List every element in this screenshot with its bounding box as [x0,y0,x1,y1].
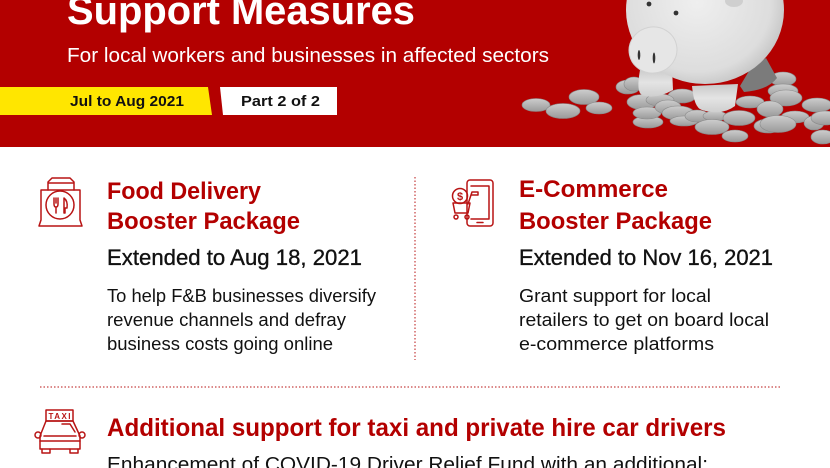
extension date: Extended to Nov 16, 2021 [519,245,773,270]
heading: Booster Package [519,208,712,235]
part tag: Part 2 of 2 [241,93,320,110]
icon: taxi [35,410,85,453]
heading: Additional support for taxi and private hire car drivers [107,414,726,442]
pig legs [740,58,777,92]
icon: food delivery bag [39,178,82,226]
icon: taxi: TAXI [48,412,70,421]
header banner [0,0,830,147]
date tag [0,87,212,115]
date tag: Jul to Aug 2021 [70,93,184,110]
pig body [626,0,784,84]
pig snout [625,23,681,77]
description: business costs going online [107,334,333,354]
heading: Food Delivery [107,178,262,205]
description: To help F&B businesses diversify [107,286,376,306]
subtitle: For local workers and businesses in affected sectors [67,45,549,67]
icon: e-commerce phone and cart [452,180,493,226]
part tag [220,87,337,115]
description: retailers to get on board local [519,310,769,330]
description: Grant support for local [519,286,711,306]
heading: Booster Package [107,208,300,235]
description: e-commerce platforms [519,334,714,354]
heading: E-Commerce [519,176,668,203]
panel: taxi and private hire support [35,410,726,468]
description: revenue channels and defray [107,310,346,330]
extension date: Extended to Aug 18, 2021 [107,245,362,270]
piggy bank and coins image [522,0,830,144]
panel: food delivery [39,178,376,354]
panel: e-commerce [452,176,773,354]
icon: e-commerce phone and cart: $ [457,191,463,203]
